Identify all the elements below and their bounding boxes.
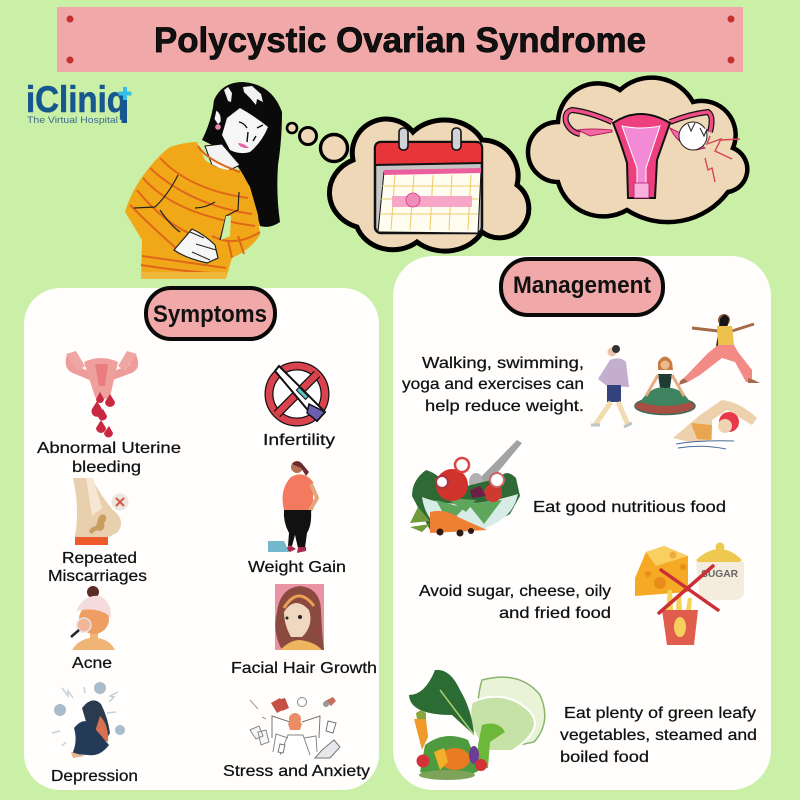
- logo: iCliniq: The Virtual Hospital: [27, 115, 118, 126]
- text: avoid sugar advice: [419, 583, 611, 622]
- warrior pose: [679, 314, 760, 385]
- icon: salad bowl: [410, 440, 522, 536]
- symptom: facial hair growth: Facial Hair Growth: [231, 660, 377, 677]
- walker: [591, 345, 632, 427]
- text: leafy vegetables advice: vegetables, steamed and: [560, 727, 757, 744]
- heading: Symptoms: [146, 288, 275, 339]
- symptom: facial hair growth: [231, 584, 377, 677]
- icon: crossed-out cheese, sugar, fries: [635, 542, 744, 645]
- symptom: depression: Depression: [51, 768, 138, 785]
- symptom: abnormal uterine bleeding: Abnormal Uterine: [37, 440, 181, 457]
- title banner: Polycystic Ovarian Syndrome: [154, 21, 646, 60]
- symptom: infertility: Infertility: [263, 432, 335, 449]
- text: exercise advice: Walking, swimming,: [422, 355, 584, 372]
- text: avoid sugar advice: and fried food: [499, 605, 611, 622]
- text: good nutritious food: Eat good nutritious food: [533, 499, 726, 516]
- text: exercise advice: yoga and exercises can: [402, 376, 584, 393]
- heading: Management: [501, 259, 663, 315]
- symptom: repeated miscarriages: Miscarriages: [48, 568, 147, 585]
- icon: calendar: [375, 128, 482, 233]
- text: leafy vegetables advice: Eat plenty of green leafy: [564, 705, 756, 722]
- text: avoid sugar advice: Avoid sugar, cheese, oily: [419, 583, 611, 600]
- symptom: abnormal uterine bleeding: bleeding: [72, 459, 141, 476]
- symptom: infertility: [263, 366, 335, 449]
- symptom: stress and anxiety: Stress and Anxiety: [223, 763, 370, 780]
- symptom: acne: Acne: [72, 655, 112, 672]
- logo: iCliniq: iCliniq: [26, 79, 127, 120]
- woman holding her stomach: [125, 82, 282, 279]
- thought bubbles: [287, 123, 348, 162]
- text: leafy vegetables advice: [560, 705, 757, 766]
- icon: uterus: [566, 110, 740, 198]
- symptom: weight gain: Weight Gain: [248, 559, 346, 576]
- heading: Management: Management: [513, 272, 651, 299]
- title banner: [57, 7, 743, 72]
- symptom: depression: [51, 682, 138, 785]
- symptom: repeated miscarriages: Repeated: [62, 550, 137, 567]
- icon: crossed-out cheese, sugar, fries: SUGAR: [701, 569, 739, 580]
- swimmer: [673, 400, 757, 449]
- thought cloud: calendar: [329, 119, 529, 251]
- text: exercise advice: help reduce weight.: [425, 398, 584, 415]
- panel: symptoms: [24, 288, 379, 790]
- text: exercise advice: [402, 355, 584, 415]
- symptom: repeated miscarriages: [48, 478, 147, 585]
- thought cloud: uterus with ovarian cyst: [528, 78, 747, 222]
- symptom: weight gain: [248, 461, 346, 576]
- symptom: stress and anxiety: [223, 697, 370, 780]
- text: leafy vegetables advice: boiled food: [560, 749, 649, 766]
- yoga meditation: [635, 356, 695, 414]
- symptom: acne: [71, 586, 115, 672]
- panel: management: [393, 256, 771, 790]
- icon: people exercising: [591, 314, 760, 449]
- icon: leafy vegetables: [409, 670, 545, 780]
- heading: Symptoms: Symptoms: [153, 301, 267, 328]
- symptom: abnormal uterine bleeding: [37, 351, 181, 476]
